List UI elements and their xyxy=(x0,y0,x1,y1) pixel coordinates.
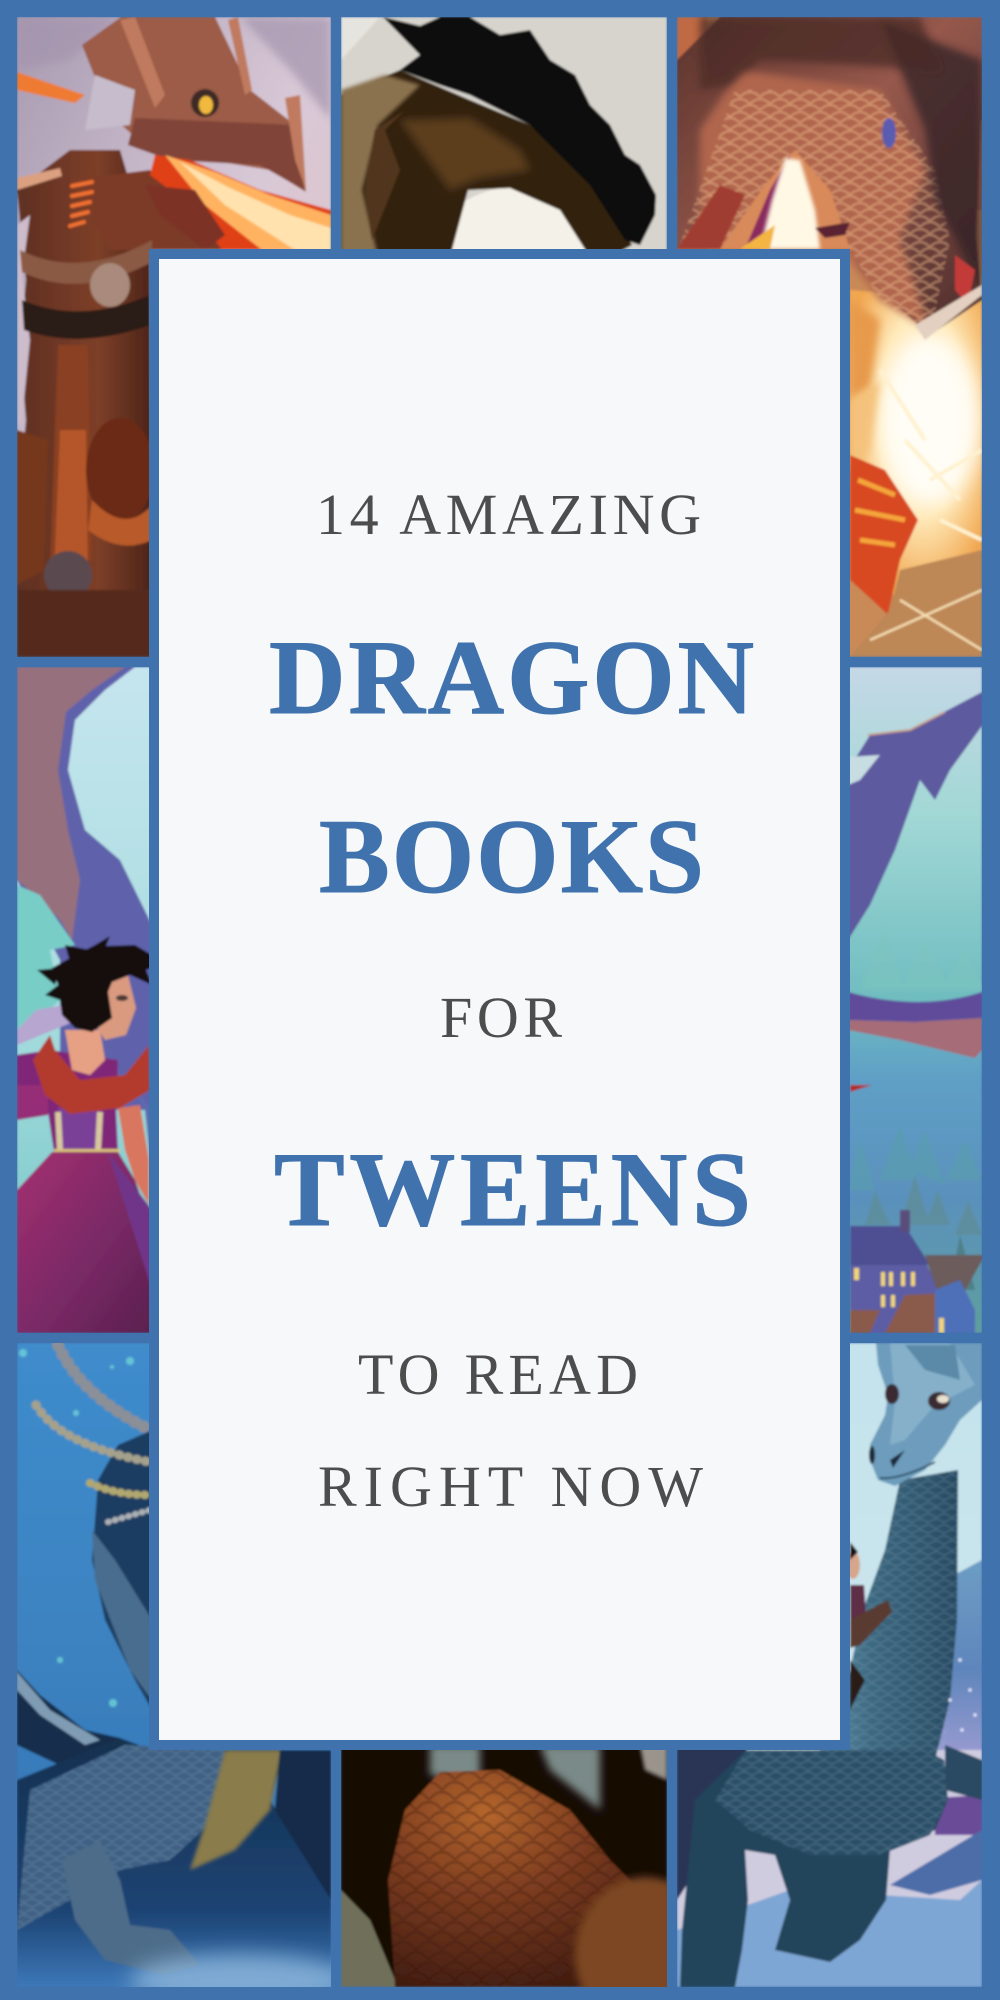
scale texture xyxy=(715,1470,958,1855)
sparkles xyxy=(19,1349,134,1707)
hair xyxy=(45,936,152,1032)
photo: girl with black hair and purple dress xyxy=(17,667,152,1333)
lower sky xyxy=(677,1750,982,1987)
beaded horns xyxy=(36,1345,150,1522)
mech dragon body column xyxy=(17,148,149,592)
photo: orange scaly dragon egg closeup xyxy=(341,1745,715,2000)
lower right lump xyxy=(575,1877,715,2000)
wing xyxy=(17,1670,120,1770)
panel: central title card xyxy=(149,249,850,1750)
evergreen treeline xyxy=(848,1125,982,1190)
side jets of flame xyxy=(17,72,85,103)
lower body xyxy=(17,1738,331,1987)
egg dome xyxy=(388,1770,667,1987)
neck xyxy=(800,1470,958,1800)
heading line: dragon: DRAGON xyxy=(269,619,754,736)
small rider xyxy=(846,1551,860,1579)
neck body xyxy=(341,70,632,257)
heading line: right now: RIGHT NOW xyxy=(318,1454,703,1519)
dragon wing xyxy=(848,692,982,940)
head xyxy=(870,1343,982,1486)
fire breath xyxy=(150,155,331,250)
photo: friendly teal long-necked dragon with rider xyxy=(677,1343,982,1987)
icy mountains xyxy=(677,1880,982,1987)
photo: purple dragon wing above teal forest and village xyxy=(848,667,985,1333)
misty trees xyxy=(981,984,982,990)
skirt xyxy=(17,1152,152,1333)
mist xyxy=(130,1954,350,2000)
black spikes xyxy=(383,17,656,245)
heading line: tweens: TWEENS xyxy=(274,1131,751,1248)
eye xyxy=(882,118,896,148)
bodice xyxy=(17,1050,118,1152)
heading line: for: FOR xyxy=(440,985,562,1050)
mouth opening and flame core xyxy=(720,150,850,249)
fire below head xyxy=(850,290,982,600)
stars xyxy=(948,1658,977,1732)
arm xyxy=(118,1105,149,1205)
head xyxy=(82,17,306,192)
lower wing band xyxy=(848,992,982,1022)
heading line: to read: TO READ xyxy=(358,1342,638,1407)
photo: steampunk mechanical dragon breathing fire xyxy=(17,17,331,657)
photo: dark dragon neck with spikes on pale background xyxy=(341,17,667,249)
gold belly scales xyxy=(190,1750,282,1870)
nostril tip highlight xyxy=(955,255,975,305)
photo: blue dragon with horns xyxy=(17,1343,350,2000)
heading line: books: BOOKS xyxy=(319,798,704,915)
glowing ribs xyxy=(70,182,92,226)
foreleg xyxy=(62,1840,200,1975)
neck and chest xyxy=(65,1030,105,1075)
scarf xyxy=(33,1035,150,1114)
village houses xyxy=(850,1264,938,1333)
wing membrane xyxy=(17,667,152,1110)
waist belt xyxy=(54,1149,120,1152)
rider in red xyxy=(850,455,918,615)
photo: red dragon head breathing fire xyxy=(677,17,982,657)
neck xyxy=(92,1430,152,1710)
face xyxy=(92,975,136,1040)
heading line: 14 amazing: 14 AMAZING xyxy=(316,482,701,547)
head xyxy=(677,17,982,335)
right background below mountain xyxy=(920,1560,982,1760)
dragon lower body and legs xyxy=(680,1750,948,1987)
